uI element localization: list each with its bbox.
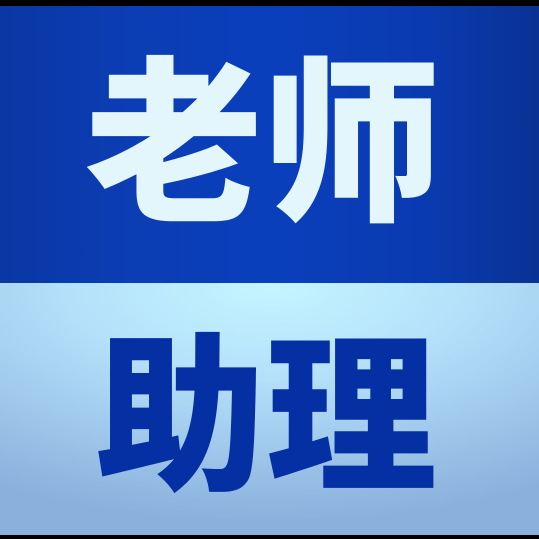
heading: 助理: 助理 — [95, 324, 437, 514]
heading: 老师: 老师 — [85, 46, 441, 245]
black top border — [0, 0, 539, 6]
black bottom border — [0, 535, 539, 539]
